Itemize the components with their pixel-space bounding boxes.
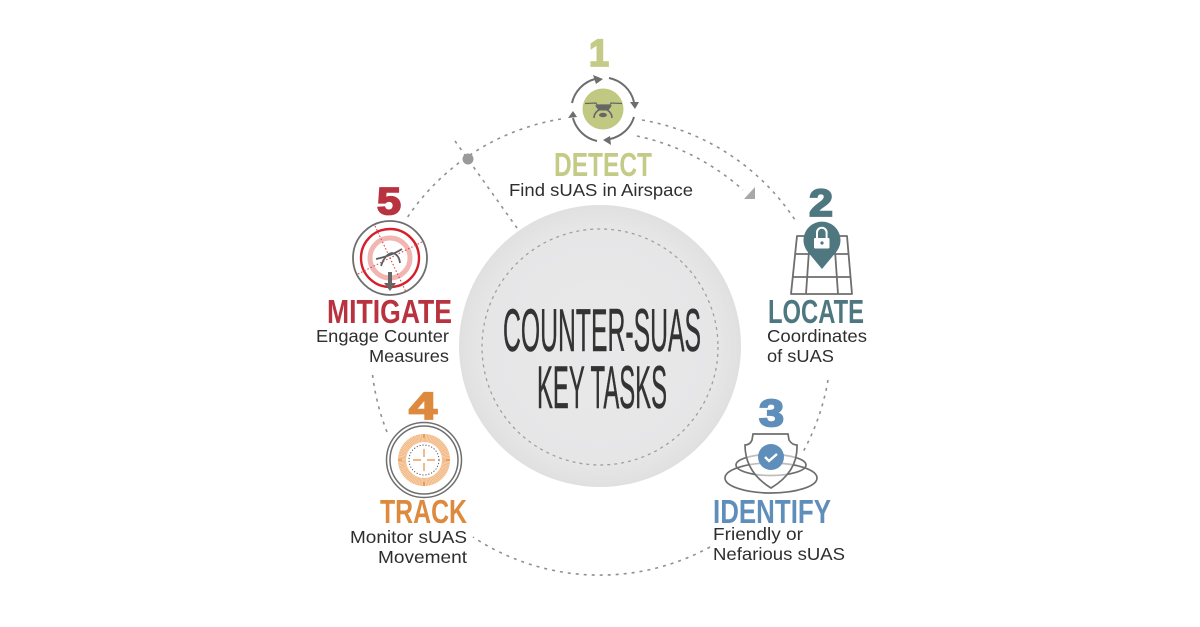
icon: tracking reticle — [386, 422, 462, 498]
description — [350, 527, 467, 567]
number 1: 1 — [589, 33, 609, 75]
number 5: 5 — [377, 181, 401, 223]
heading: TRACK — [380, 493, 467, 530]
icon: detect drone with cycle arrows — [568, 75, 639, 145]
heading: LOCATE — [768, 293, 864, 330]
description — [316, 326, 449, 366]
heading: DETECT — [554, 146, 652, 183]
infographic: counter-sUAS key tasks cycle: COUNTER-SUAS — [503, 297, 701, 364]
heading: IDENTIFY — [713, 493, 831, 530]
description: Nefarious sUAS — [713, 544, 845, 564]
icon: mitigation target — [353, 221, 427, 295]
center panel: counter-sUAS key tasks — [459, 205, 741, 487]
description: Movement — [378, 547, 467, 567]
description: Monitor sUAS — [350, 527, 467, 547]
description — [713, 524, 845, 564]
step 3: identify — [713, 393, 845, 564]
step 5: mitigate — [316, 181, 452, 366]
icon: shield with check — [725, 434, 817, 493]
step 1: detect — [509, 33, 693, 200]
waypoint dot — [462, 154, 474, 164]
icon: map pin with lock — [791, 222, 852, 294]
number 4: 4 — [409, 386, 437, 428]
description: Coordinates — [767, 326, 867, 346]
title — [503, 297, 701, 421]
description — [767, 326, 867, 366]
dashed cycle path — [372, 119, 828, 575]
description: Measures — [369, 346, 449, 366]
description: Friendly or — [713, 524, 803, 544]
description: Find sUAS in Airspace — [509, 180, 693, 200]
number 2: 2 — [809, 183, 833, 225]
number 3: 3 — [759, 393, 784, 435]
title: KEY TASKS — [537, 354, 667, 421]
step 4: track — [350, 386, 467, 567]
step 2: locate — [767, 183, 867, 366]
heading: MITIGATE — [327, 293, 452, 330]
arrow: into locate — [744, 187, 755, 199]
description: of sUAS — [767, 346, 834, 366]
description: Engage Counter — [316, 326, 449, 346]
